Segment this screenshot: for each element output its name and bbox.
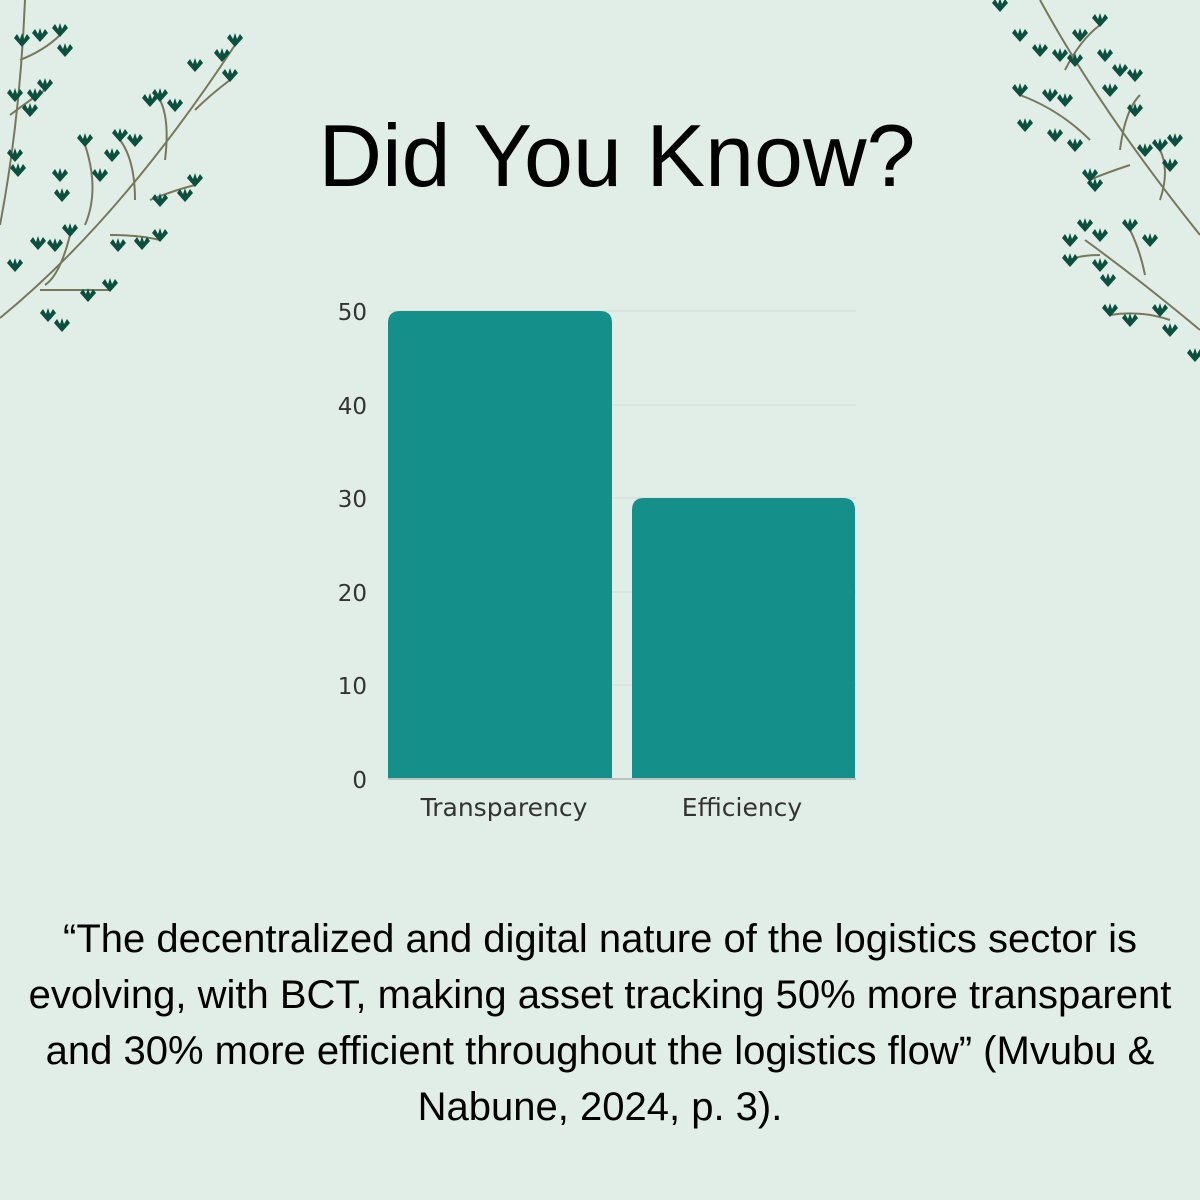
y axis labels: 50 bbox=[338, 300, 367, 326]
x axis labels bbox=[420, 793, 802, 822]
y axis labels: 20 bbox=[338, 581, 367, 607]
quote text: Nabune, 2024, p. 3). bbox=[418, 1085, 782, 1129]
y axis labels: 10 bbox=[338, 674, 367, 700]
bar: Transparency bbox=[388, 311, 612, 778]
quote text bbox=[29, 917, 1172, 1129]
x axis labels: Efficiency bbox=[682, 793, 802, 822]
title: Did You Know? bbox=[319, 106, 915, 205]
bar: Efficiency bbox=[632, 498, 855, 778]
quote text: and 30% more efficient throughout the logistics flow” (Mvubu & bbox=[46, 1029, 1154, 1073]
quote text: evolving, with BCT, making asset tracking 50% more transparent bbox=[29, 973, 1171, 1017]
quote text: “The decentralized and digital nature of the logistics sector is bbox=[63, 917, 1137, 961]
y axis labels: 40 bbox=[338, 394, 367, 420]
y axis labels: 0 bbox=[352, 768, 367, 794]
y axis labels: 30 bbox=[338, 487, 367, 513]
x axis labels: Transparency bbox=[420, 793, 588, 822]
y axis labels bbox=[338, 300, 367, 794]
